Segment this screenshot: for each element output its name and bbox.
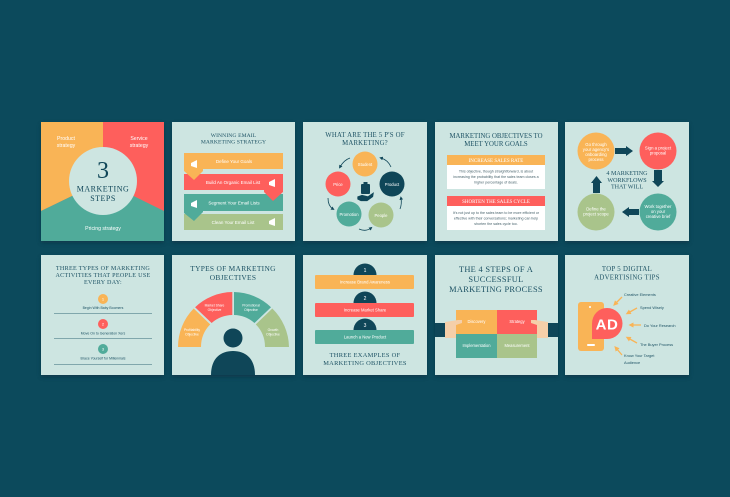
card: shorten the sales cycle: effective with their conversations; marketing can help xyxy=(454,216,538,220)
circle: project scope xyxy=(578,194,614,230)
grid: strategy: Strategy xyxy=(509,319,526,324)
arrow: down xyxy=(652,170,664,187)
heading: MARKETING OBJECTIVES xyxy=(323,360,407,367)
left arm xyxy=(435,320,462,338)
right arm xyxy=(531,320,558,338)
circle: creative brief xyxy=(640,194,676,230)
circle: agency onboarding: Go through xyxy=(585,142,607,147)
label: service strategy: Service xyxy=(130,136,148,142)
step 1: 1 xyxy=(364,268,367,274)
circle: agency onboarding: process xyxy=(588,157,604,162)
step 2: Increase Market Share xyxy=(344,308,387,312)
circle: agency onboarding xyxy=(578,132,614,170)
step 1: Increase Brand Awareness xyxy=(340,280,390,284)
label: product strategy: Product xyxy=(57,136,75,142)
panel: marketing objectives to meet your goals xyxy=(435,122,558,241)
item 3: 3 xyxy=(102,346,105,352)
bar: define your goals: Define Your Goals xyxy=(216,159,253,164)
segment: growth: Growth xyxy=(268,328,278,332)
segment: promotional: Promotional xyxy=(242,304,260,308)
icon: person xyxy=(211,328,255,375)
heading: WHAT ARE THE 5 P'S OF xyxy=(325,132,405,139)
item 2: Move On to Generation Xers xyxy=(81,332,126,336)
icon: AD bubble: AD xyxy=(596,316,618,334)
tip labels: Know Your Target xyxy=(624,353,654,358)
card: shorten the sales cycle: It's not just up to the sales team to be more efficient or xyxy=(453,211,539,215)
orange segment: product strategy xyxy=(41,122,103,211)
card: increase sales: increasing the probability that the sales team closes a xyxy=(453,175,539,179)
cycle arrows xyxy=(328,158,401,230)
circle: project scope: project scope xyxy=(583,212,609,216)
card: increase sales: INCREASE SALES RATE xyxy=(469,159,523,164)
step 3: Launch a New Product xyxy=(344,334,387,340)
center title: WORKFLOWS xyxy=(607,178,647,184)
item 1 xyxy=(54,294,152,314)
heading: THREE TYPES OF MARKETING xyxy=(56,266,150,272)
tip labels: Audience xyxy=(624,360,640,365)
card: shorten the sales cycle: shorten the sales cycle too. xyxy=(474,222,518,226)
card: increase sales: higher percentage of deals. xyxy=(474,180,518,184)
panel: three examples of marketing objectives xyxy=(303,255,427,375)
circle: people: People xyxy=(374,213,388,218)
center circle with title: MARKETING xyxy=(77,184,129,194)
tip arrows xyxy=(615,297,641,355)
panel: 5 Ps of marketing xyxy=(303,122,427,241)
grid: measurement: Measurement xyxy=(504,343,530,348)
circle: promotion: Promotion xyxy=(339,212,359,217)
center title: 4 MARKETING xyxy=(606,171,648,177)
bar: clean your email list: Clean Your Email List xyxy=(212,220,255,225)
teal segment: pricing strategy xyxy=(41,181,164,241)
panel: top 5 digital advertising tips xyxy=(565,255,689,375)
bar: segment your email lists: Segment Your Email Lists xyxy=(208,200,260,206)
item 3: Brace Yourself for Millennials xyxy=(81,356,126,360)
step 1 xyxy=(315,264,414,289)
circle: project scope: Define the xyxy=(586,206,606,212)
panel: 3 marketing steps xyxy=(41,122,164,241)
segment: promotional: Objective xyxy=(244,308,258,312)
item 2: 2 xyxy=(102,322,105,326)
tip labels: Do Your Research xyxy=(644,323,676,328)
bar: build an organic email list: Build An Organic Email List xyxy=(206,180,261,185)
heading: TOP 5 DIGITAL xyxy=(602,266,652,273)
step 3: 3 xyxy=(364,323,367,329)
circle: project proposal xyxy=(640,132,676,170)
label: product strategy: strategy xyxy=(57,143,76,149)
step 3 xyxy=(315,318,414,344)
panel: three types of marketing activities xyxy=(41,255,164,375)
circle: project proposal: Sign a project xyxy=(645,146,671,150)
grid: implementation: Implementation xyxy=(462,343,491,348)
heading: ADVERTISING TIPS xyxy=(594,274,660,282)
segment: profitability: Profitability xyxy=(184,328,200,332)
circle: student: Student xyxy=(358,162,373,167)
center circle with title: STEPS xyxy=(90,194,116,203)
heading: SUCCESSFUL xyxy=(468,275,524,284)
item 3 xyxy=(54,344,152,365)
heading: OBJECTIVES xyxy=(210,273,256,282)
center title: THAT WILL xyxy=(611,185,643,191)
item 1: Begin With Baby Boomers xyxy=(83,306,124,310)
segment: market share: Market Share xyxy=(205,304,224,308)
card: shorten the sales cycle: SHORTEN THE SALES CYCLE xyxy=(462,200,530,205)
center circle with title xyxy=(69,147,137,215)
label: pricing strategy: Pricing strategy xyxy=(85,226,121,232)
label: service strategy: strategy xyxy=(130,143,149,149)
heading: MARKETING STRATEGY xyxy=(201,140,266,146)
heading: TYPES OF MARKETING xyxy=(190,264,276,273)
arrow: right xyxy=(615,146,633,156)
tip labels: Creative Elements xyxy=(624,292,656,297)
heading: MARKETING? xyxy=(342,140,388,147)
icon: phone xyxy=(578,302,604,351)
panel: 4 steps of a successful marketing process xyxy=(435,255,558,375)
circle: agency onboarding: your agency's xyxy=(583,147,609,152)
card: increase sales xyxy=(447,155,545,189)
circle: creative brief: creative brief xyxy=(646,214,671,219)
circle: agency onboarding: onboarding xyxy=(585,152,607,157)
step 2 xyxy=(315,292,414,317)
tip labels: The Buyer Process xyxy=(640,342,673,347)
card: increase sales: This objective, though straightforward, is about xyxy=(459,170,533,174)
circle: price: Price xyxy=(333,182,343,187)
card: shorten the sales cycle xyxy=(447,196,545,230)
item 2 xyxy=(54,319,152,339)
grid: discovery: Discovery xyxy=(468,319,486,324)
item 1: 1 xyxy=(102,296,105,302)
segment: promotional xyxy=(234,292,271,323)
panel: 4 marketing workflows xyxy=(565,122,689,241)
arrow: up xyxy=(591,176,602,193)
circle: creative brief: Work together xyxy=(645,204,671,209)
center circle with title: 3 xyxy=(97,158,109,184)
heading: MEET YOUR GOALS xyxy=(464,141,528,148)
segment: market share xyxy=(195,292,232,323)
segment: profitability xyxy=(178,308,210,347)
heading: WINNING EMAIL xyxy=(211,133,256,139)
segment: market share: Objective xyxy=(208,308,222,312)
segment: growth xyxy=(256,308,289,347)
heading: THE 4 STEPS OF A xyxy=(459,265,533,274)
heading: MARKETING OBJECTIVES TO xyxy=(449,133,543,140)
heading: ACTIVITIES THAT PEOPLE USE xyxy=(55,273,151,279)
panel: types of marketing objectives xyxy=(172,255,295,375)
arrow: left xyxy=(622,207,639,217)
panel: winning email marketing strategy xyxy=(172,122,295,241)
heading: THREE EXAMPLES OF xyxy=(330,352,400,359)
icon: hand holding clipboard xyxy=(358,182,373,200)
tip labels: Spend Wisely xyxy=(640,305,664,310)
heading: EVERY DAY: xyxy=(84,280,122,286)
circle: product: Product xyxy=(385,182,400,187)
tip labels xyxy=(624,292,676,365)
segment: growth: Objective xyxy=(266,332,280,336)
circle: creative brief: on your xyxy=(651,209,666,214)
segment: profitability: Objective xyxy=(185,332,199,336)
circle: project proposal: proposal xyxy=(650,150,666,156)
heading: MARKETING PROCESS xyxy=(449,285,543,294)
step 2: 2 xyxy=(364,296,367,302)
